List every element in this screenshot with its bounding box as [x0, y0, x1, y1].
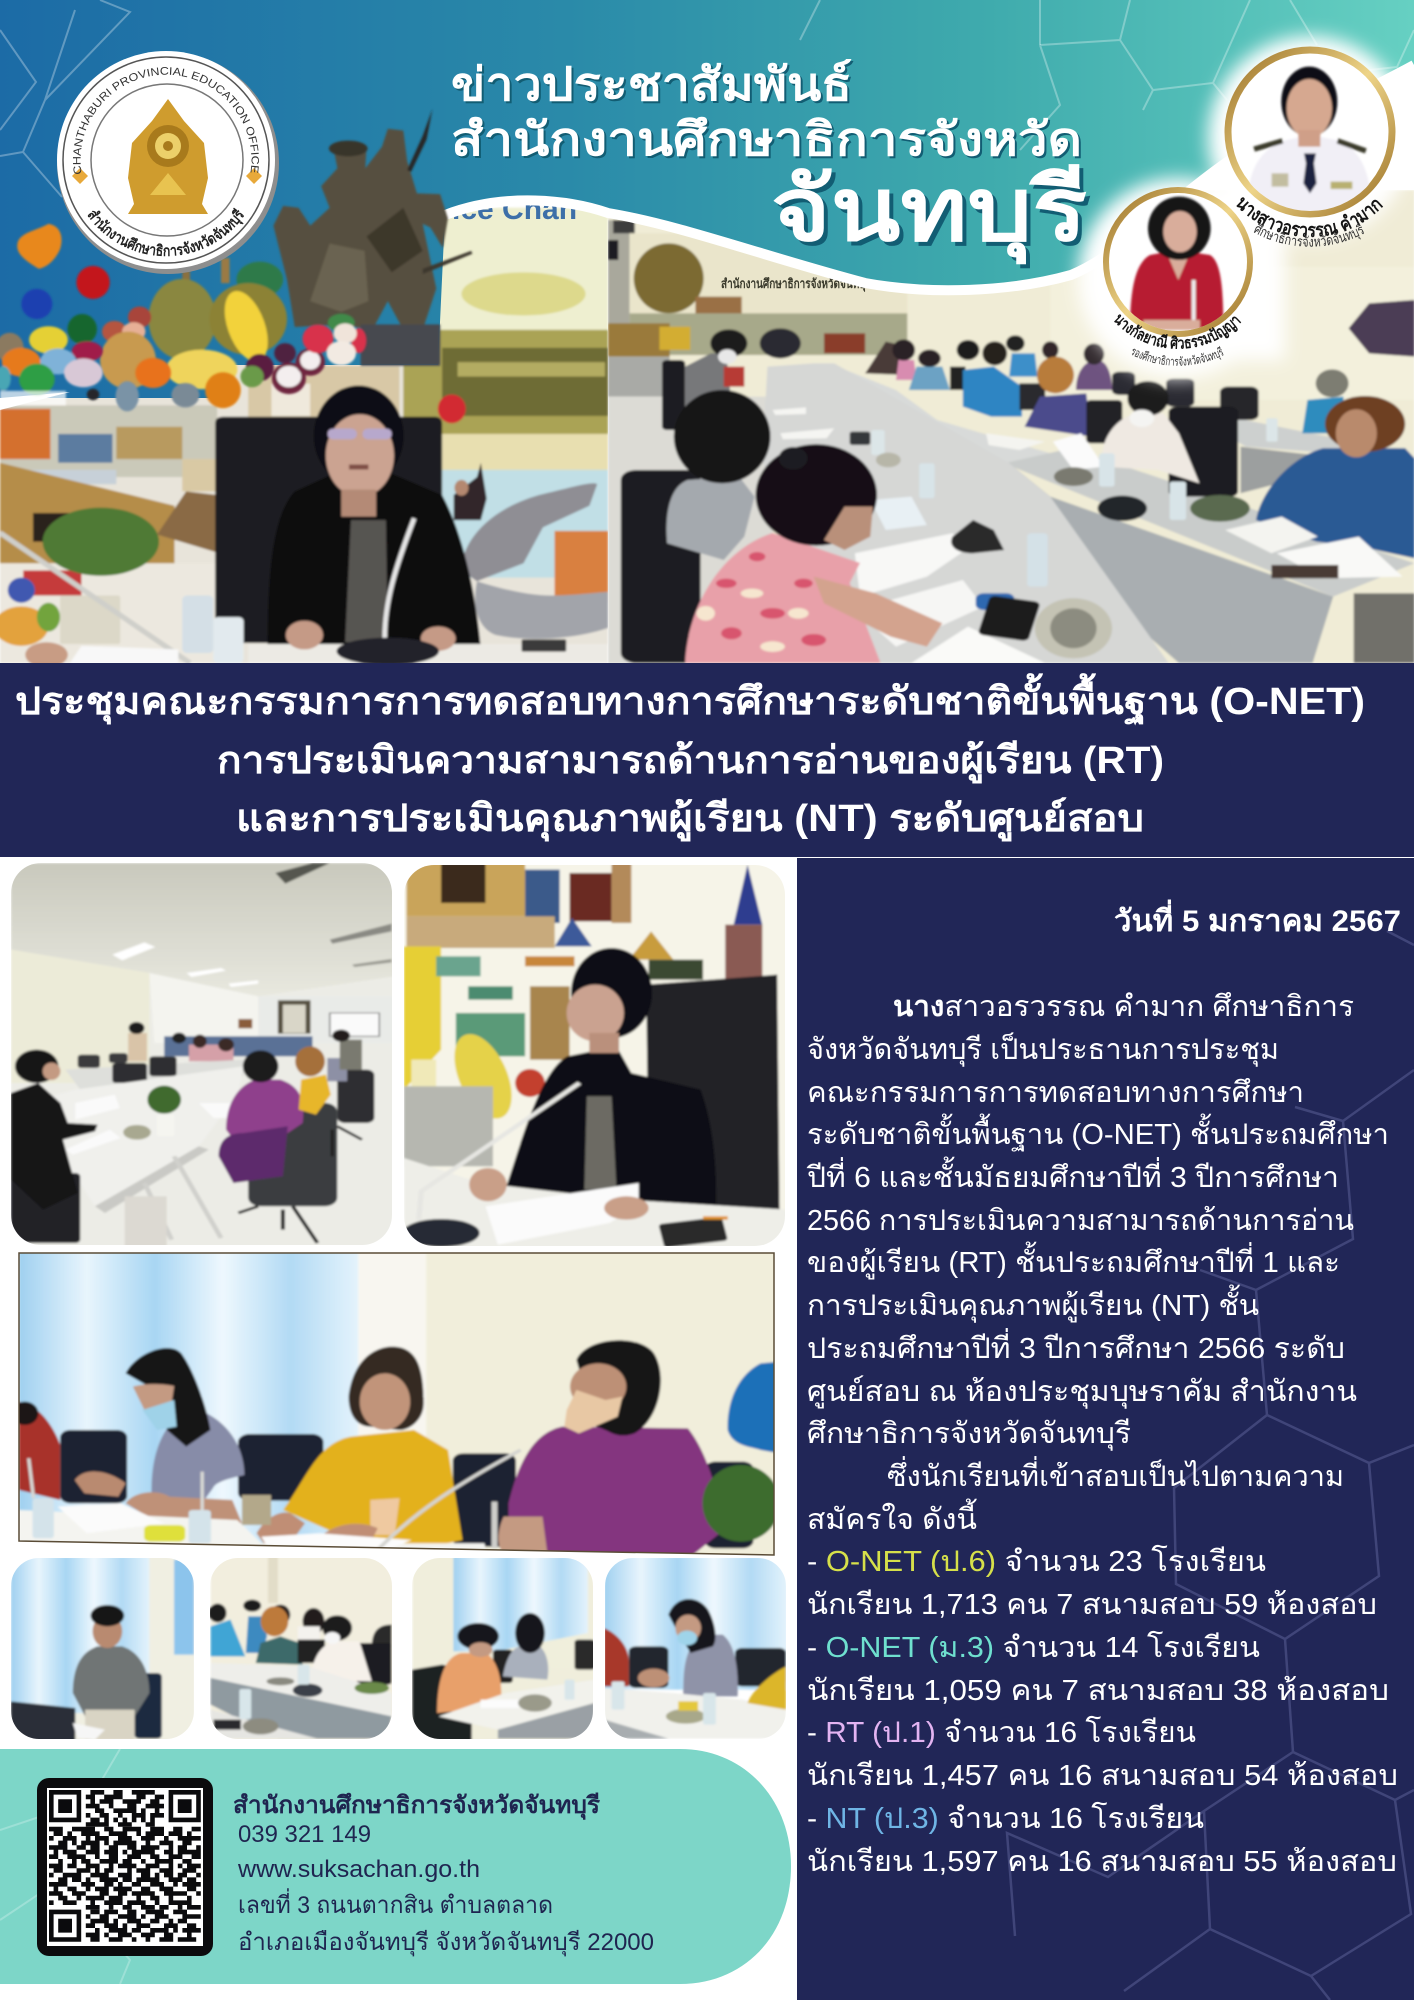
- article body text: ศูนย์สอบ ณ ห้องประชุมบุษราคัม สำนักงาน: [807, 1375, 1357, 1409]
- right panel: article: [797, 858, 1414, 2000]
- header title: ข่าวประชาสัมพันธ์: [451, 58, 852, 110]
- date: วันที่ 5 มกราคม 2567: [1114, 899, 1401, 938]
- article body text: - O-NET (ม.3) จำนวน 14 โรงเรียน: [807, 1630, 1260, 1664]
- article body text: ศึกษาธิการจังหวัดจันทบุรี: [807, 1418, 1131, 1451]
- header title: สำนักงานศึกษาธิการจังหวัด: [451, 113, 1082, 165]
- photo: wide view of meeting room: [11, 863, 394, 1248]
- portrait: deputy education officer: [1103, 187, 1253, 366]
- photo: participants writing: [412, 1553, 595, 1743]
- banner lettering in room: สำนักงานศึกษาธิการจังหวัดจันทบุรี: [721, 276, 871, 292]
- article body text: ระดับชาติขั้นพื้นฐาน (O-NET) ชั้นประถมศึกษา: [807, 1113, 1389, 1152]
- article body text: [807, 991, 1398, 1878]
- article body text: - O-NET (ป.6) จำนวน 23 โรงเรียน: [807, 1544, 1266, 1578]
- portrait: provincial education officer: [1224, 46, 1396, 247]
- fruits: [100, 258, 366, 394]
- article body text: นักเรียน 1,597 คน 16 สนามสอบ 55 ห้องสอบ: [807, 1846, 1397, 1878]
- article body text: - RT (ป.1) จำนวน 16 โรงเรียน: [807, 1715, 1196, 1749]
- article body text: - NT (ป.3) จำนวน 16 โรงเรียน: [807, 1801, 1204, 1835]
- header teal banner with wave: [0, 0, 1414, 410]
- portrait: provincial education officer: นางสาวอรวรรณ คำมาก: [1236, 197, 1384, 238]
- article body text: นักเรียน 1,059 คน 7 สนามสอบ 38 ห้องสอบ: [807, 1675, 1389, 1707]
- article body text: สมัครใจ ดังนี้: [807, 1498, 977, 1536]
- photo: chairperson at table: [402, 863, 787, 1248]
- article body text: คณะกรรมการการทดสอบทางการศึกษา: [807, 1077, 1304, 1109]
- article body text: นักเรียน 1,457 คน 16 สนามสอบ 54 ห้องสอบ: [807, 1760, 1398, 1792]
- QR code: [37, 1778, 213, 1956]
- header photo: chairperson with mural backdrop: [0, 193, 608, 667]
- photo: man with laptop: [11, 1553, 195, 1743]
- contact details: อำเภอเมืองจันทบุรี จังหวัดจันทบุรี 22000: [238, 1929, 654, 1957]
- contact details: 039 321 149: [238, 1821, 371, 1848]
- title band: และการประเมินคุณภาพผู้เรียน (NT) ระดับศูนย์สอบ: [236, 797, 1144, 842]
- statue: [273, 109, 472, 366]
- portrait: deputy education officer: นางกัลยาณี ศิวธรรมปัญญา: [1114, 314, 1242, 349]
- article body text: จังหวัดจันทบุรี เป็นประธานการประชุม: [807, 1031, 1279, 1067]
- portrait: deputy education officer: รองศึกษาธิการจังหวัดจันทบุรี: [1132, 346, 1224, 366]
- article body text: 2566 การประเมินความสามารถด้านการอ่าน: [807, 1205, 1354, 1237]
- article body text: ประถมศึกษาปีที่ 3 ปีการศึกษา 2566 ระดับ: [807, 1328, 1345, 1365]
- photo: woman with mask: [604, 1556, 787, 1739]
- article body text: นางสาวอรวรรณ คำมาก ศึกษาธิการ: [893, 991, 1354, 1023]
- article body text: นักเรียน 1,713 คน 7 สนามสอบ 59 ห้องสอบ: [807, 1589, 1377, 1621]
- title band: [0, 663, 1414, 857]
- mural lettering: ice Chan: [452, 193, 577, 226]
- contact details: [233, 1792, 654, 1957]
- contact details: www.suksachan.go.th: [237, 1856, 480, 1883]
- article body text: การประเมินคุณภาพผู้เรียน (NT) ชั้น: [807, 1284, 1259, 1323]
- logo: provincial education office seal: CHANTHABURI PROVINCIAL EDUCATION OFFICE: [73, 67, 259, 174]
- header title: [451, 58, 1087, 265]
- photo: three committee members: [11, 1250, 780, 1562]
- header title: จันทบุรี: [771, 160, 1087, 265]
- emblem: [128, 99, 208, 214]
- title band: ประชุมคณะกรรมการการทดสอบทางการศึกษาระดับชาติขั้นพื้นฐาน (O-NET): [15, 673, 1365, 726]
- photo: seated participants: [209, 1553, 394, 1743]
- article body text: ของผู้เรียน (RT) ชั้นประถมศึกษาปีที่ 1 และ: [807, 1241, 1340, 1280]
- contact details: เลขที่ 3 ถนนตากสิน ตำบลตลาด: [238, 1888, 553, 1919]
- portrait glow: [1078, 36, 1412, 378]
- contact details: สำนักงานศึกษาธิการจังหวัดจันทบุรี: [233, 1792, 600, 1821]
- header photo: meeting room: [608, 190, 1414, 663]
- portrait: provincial education officer: ศึกษาธิการจังหวัดจันทบุรี: [1254, 222, 1364, 247]
- article body text: ปีที่ 6 และชั้นมัธยมศึกษาปีที่ 3 ปีการศึกษา: [807, 1156, 1339, 1194]
- contact panel: [0, 1749, 791, 1984]
- article body text: ซึ่งนักเรียนที่เข้าสอบเป็นไปตามความ: [887, 1456, 1344, 1493]
- logo: provincial education office seal: สำนักงานศึกษาธิการจังหวัดจันทบุรี: [88, 208, 244, 256]
- gemstones: [0, 224, 241, 411]
- title band: การประเมินความสามารถด้านการอ่านของผู้เรียน (RT): [217, 740, 1164, 784]
- logo: provincial education office seal: [57, 51, 279, 274]
